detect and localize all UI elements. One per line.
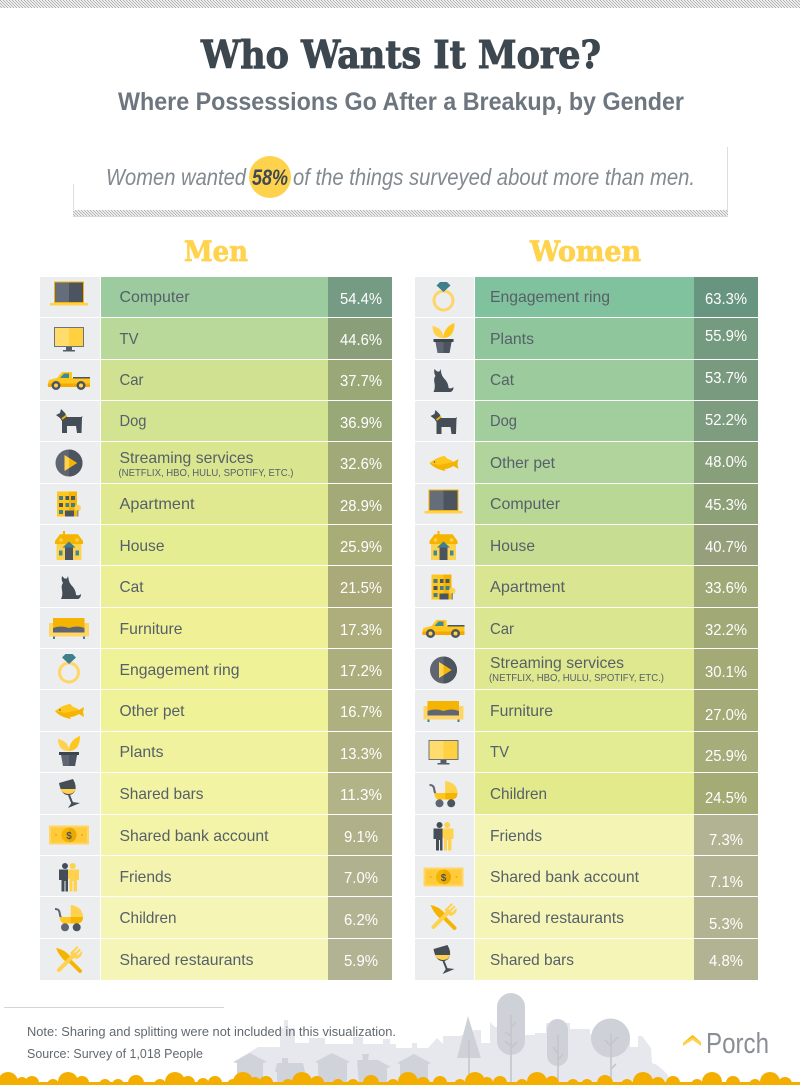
row: Computer: Computer <box>120 289 190 306</box>
row: Plants <box>415 318 758 359</box>
row: Car: Car <box>120 372 144 389</box>
row: Plants: 55.9% <box>705 328 747 345</box>
row: Streaming services: 30.1% <box>705 664 747 681</box>
row: Plants: Plants <box>490 331 534 348</box>
heading: Women: Women <box>529 235 641 268</box>
row: TV <box>415 732 758 772</box>
row: Other pet: Other pet <box>120 703 185 720</box>
row: Engagement ring: Engagement ring <box>120 662 240 679</box>
row: Children: 24.5% <box>705 790 747 807</box>
row: Shared bank account: Shared bank account <box>120 828 269 845</box>
row: TV: TV <box>490 744 509 761</box>
row: Friends <box>415 815 758 855</box>
row: Car: 32.2% <box>705 622 747 639</box>
row: House <box>40 525 392 565</box>
row: TV: TV <box>120 331 139 348</box>
row: Shared bars <box>40 773 392 814</box>
row: Other pet: Other pet <box>490 455 556 472</box>
panel: women table <box>415 277 758 980</box>
row: Shared bars: Shared bars <box>120 786 204 803</box>
row: Streaming services: 32.6% <box>340 456 382 473</box>
row: Cat <box>40 566 392 607</box>
row: Other pet <box>415 442 758 483</box>
row: TV: 25.9% <box>705 748 747 765</box>
row: Apartment <box>415 566 758 607</box>
row: Furniture: Furniture <box>490 703 553 720</box>
row: Shared bars: Shared bars <box>490 952 574 969</box>
row: Shared bank account <box>40 815 392 855</box>
row: Plants: Plants <box>120 744 164 761</box>
row: Streaming services: (NETFLIX, HBO, HULU, SPOTIFY, ETC.) <box>489 673 664 684</box>
row: Streaming services: (NETFLIX, HBO, HULU, SPOTIFY, ETC.) <box>118 468 294 479</box>
row: House: 25.9% <box>340 539 382 556</box>
row: Dog <box>415 401 758 441</box>
row: Dog: Dog <box>490 413 517 430</box>
callout: of the things surveyed about more than men. <box>293 164 695 190</box>
top hatch band <box>0 0 800 8</box>
row: Other pet: 16.7% <box>340 704 382 721</box>
row: Friends: 7.3% <box>709 832 743 849</box>
row: Car: 37.7% <box>340 373 382 390</box>
row: TV: 44.6% <box>340 332 382 349</box>
row: Cat: 21.5% <box>340 580 382 597</box>
row: Plants: 13.3% <box>340 746 382 763</box>
row: Apartment <box>40 484 392 524</box>
row: Dog: Dog <box>120 413 146 430</box>
row: Shared restaurants: 5.9% <box>344 953 378 970</box>
callout: Women wanted <box>106 164 247 190</box>
row: Children <box>40 897 392 938</box>
row: Plants <box>40 732 392 772</box>
row: Engagement ring <box>40 649 392 689</box>
callout <box>73 147 728 217</box>
row: Furniture: 17.3% <box>340 622 382 639</box>
panel: men table <box>40 277 392 980</box>
row: Streaming services <box>415 649 758 689</box>
row: Apartment: Apartment <box>120 496 195 513</box>
row: Streaming services: Streaming services <box>120 450 254 467</box>
subtitle: Where Possessions Go After a Breakup, by Gender <box>118 88 684 116</box>
row: Friends: Friends <box>490 828 542 845</box>
row: Friends: Friends <box>120 869 172 886</box>
row: Children <box>415 773 758 814</box>
note text: Note: Sharing and splitting were not included in this visualization. <box>27 1025 396 1039</box>
row: Engagement ring: 63.3% <box>705 291 747 308</box>
row: Other pet <box>40 690 392 731</box>
row: Computer: 54.4% <box>340 291 382 308</box>
row: Apartment: 33.6% <box>705 580 747 597</box>
row: Shared bars: 4.8% <box>709 953 743 970</box>
row: Computer: 45.3% <box>705 497 747 514</box>
row: Car: Car <box>490 621 515 638</box>
row: Other pet: 48.0% <box>705 454 747 471</box>
row: Cat: 53.7% <box>705 370 747 387</box>
row: Shared bank account: Shared bank account <box>490 869 640 886</box>
row: Cat: Cat <box>490 372 515 389</box>
row: Shared bank account: 9.1% <box>344 829 378 846</box>
row: Furniture <box>40 608 392 648</box>
row: House <box>415 525 758 565</box>
row: Children: Children <box>490 786 547 803</box>
row: Shared restaurants: Shared restaurants <box>490 910 624 927</box>
row: Dog: 36.9% <box>340 415 382 432</box>
row: Dog <box>40 401 392 441</box>
row: House: 40.7% <box>705 539 747 556</box>
row: Dog: 52.2% <box>705 412 747 429</box>
row: Computer <box>415 484 758 524</box>
row: Furniture: Furniture <box>120 621 183 638</box>
row: Cat <box>415 360 758 400</box>
row: Streaming services: Streaming services <box>490 655 624 672</box>
row: Children: Children <box>120 910 176 927</box>
row: Shared bank account: 7.1% <box>709 874 743 891</box>
row: Cat: Cat <box>120 579 144 596</box>
row: House: House <box>120 538 165 555</box>
row: Streaming services <box>40 442 392 483</box>
footer hedge <box>0 1072 800 1085</box>
row: Shared bars <box>415 939 758 980</box>
row: House: House <box>490 538 535 555</box>
row: Friends <box>40 856 392 896</box>
row: Engagement ring: Engagement ring <box>490 289 610 306</box>
source text: Source: Survey of 1,018 People <box>27 1047 203 1061</box>
row: Car <box>415 608 758 648</box>
row: Computer <box>40 277 392 317</box>
row: Shared restaurants: Shared restaurants <box>120 952 254 969</box>
heading: Men: Men <box>184 235 248 268</box>
row: Shared restaurants <box>415 897 758 938</box>
footer divider <box>4 1007 224 1008</box>
row: Shared bars: 11.3% <box>340 787 382 804</box>
title: Who Wants It More? <box>200 32 601 77</box>
callout: 58% <box>252 165 288 190</box>
row: Engagement ring <box>415 277 758 317</box>
row: Engagement ring: 17.2% <box>340 663 382 680</box>
row: Friends: 7.0% <box>344 870 378 887</box>
row: Furniture <box>415 690 758 731</box>
row: Computer: Computer <box>490 496 561 513</box>
row: Car <box>40 360 392 400</box>
row: Shared restaurants: 5.3% <box>709 916 743 933</box>
row: Apartment: 28.9% <box>340 498 382 515</box>
logo: Porch: Porch <box>706 1028 769 1060</box>
row: Furniture: 27.0% <box>705 707 747 724</box>
row: Children: 6.2% <box>344 912 378 929</box>
row: Shared restaurants <box>40 939 392 980</box>
row: Shared bank account <box>415 856 758 896</box>
row: TV <box>40 318 392 359</box>
logo: Porch <box>683 1028 769 1060</box>
row: Apartment: Apartment <box>490 579 566 596</box>
footer illustration: skyline <box>233 993 668 1085</box>
